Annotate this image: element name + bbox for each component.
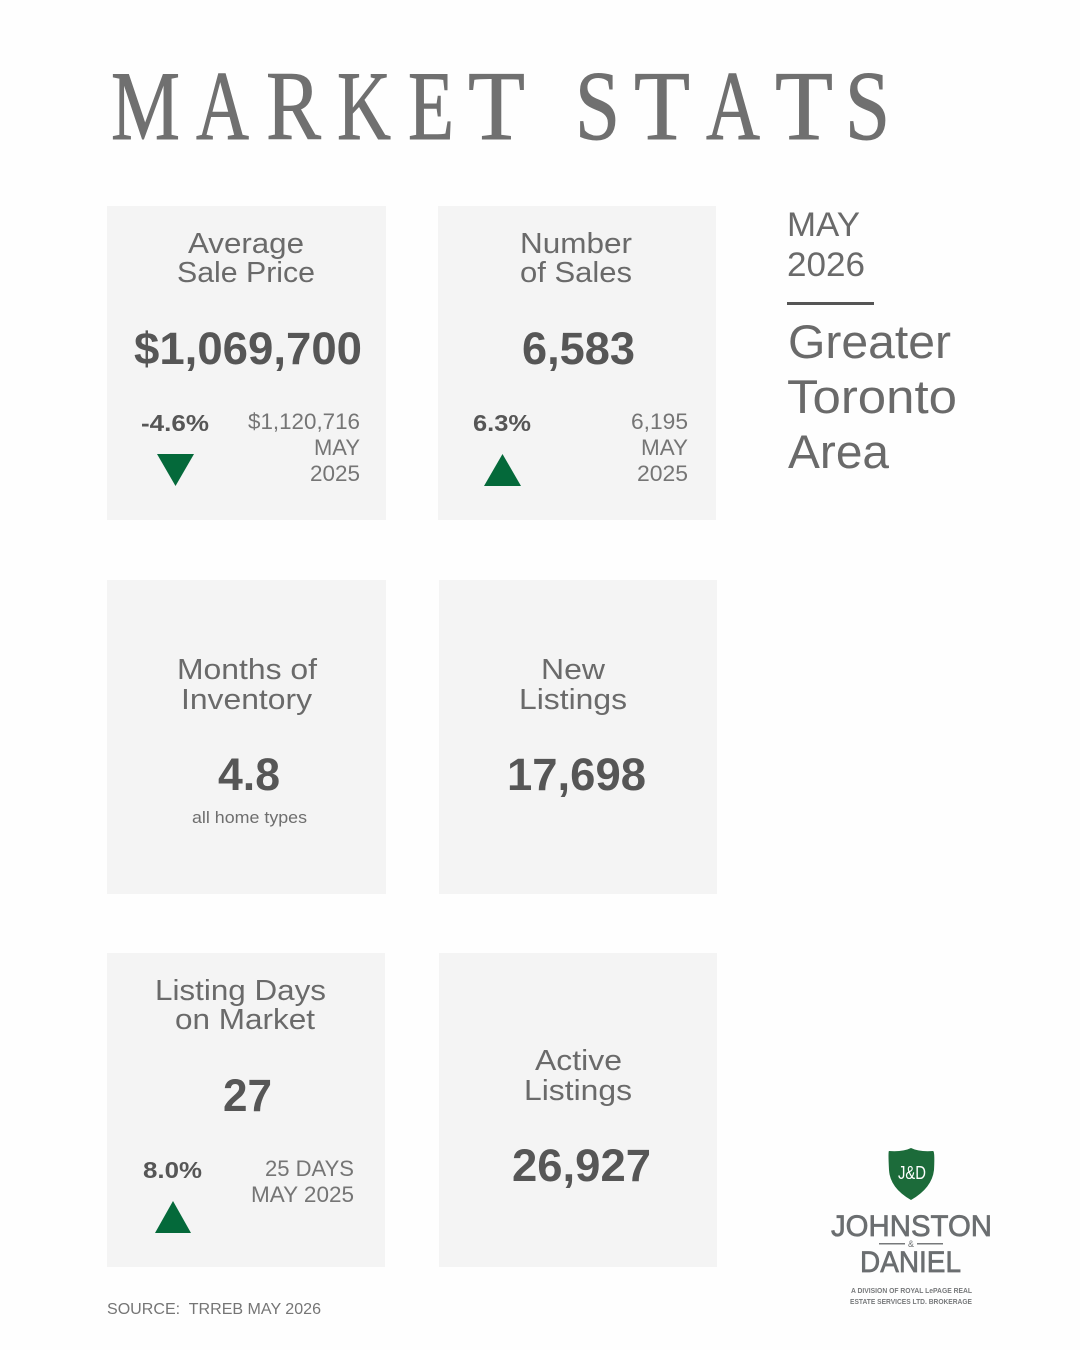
- title: A: [706, 52, 760, 161]
- panel: active listings: [439, 953, 717, 1267]
- date and region: Toronto: [787, 370, 957, 423]
- title: T: [775, 52, 833, 161]
- date and region: Greater: [788, 315, 951, 368]
- title: E: [408, 52, 454, 161]
- title: [111, 52, 890, 161]
- logo: ESTATE SERVICES LTD. BROKERAGE: [850, 1297, 972, 1306]
- title: T: [634, 52, 690, 161]
- logo: A DIVISION OF ROYAL LePAGE REAL: [851, 1286, 972, 1295]
- panel: months of inventory: all home types: [192, 808, 307, 827]
- panel: average sale price: [107, 206, 386, 520]
- logo: DANIEL: [860, 1246, 961, 1279]
- logo: &: [908, 1239, 914, 1249]
- title: S: [845, 52, 890, 161]
- panel: listing days on market: [107, 953, 385, 1267]
- panel: number of sales: 2025: [637, 461, 688, 486]
- panel: listing days on market: 25 DAYS: [265, 1156, 354, 1181]
- title: M: [111, 52, 180, 161]
- panel: new listings: [439, 580, 717, 894]
- panel: listing days on market: 27: [223, 1070, 272, 1121]
- icon: up arrow: [484, 454, 521, 486]
- panel: new listings: New: [541, 654, 606, 686]
- panel: listing days on market: Listing Days: [155, 975, 326, 1007]
- panel: average sale price: $1,069,700: [134, 323, 362, 374]
- logo: JOHNSTON: [831, 1210, 992, 1243]
- panel: new listings: 17,698: [507, 749, 646, 800]
- panel: number of sales: [438, 206, 716, 520]
- date and region: MAY: [787, 206, 860, 244]
- panel: number of sales: Number: [520, 228, 632, 260]
- source note: SOURCE: TRREB MAY 2026: [107, 1301, 321, 1318]
- panel: number of sales: MAY: [641, 435, 688, 460]
- panel: months of inventory: [107, 580, 386, 894]
- panel: listing days on market: on Market: [175, 1004, 315, 1036]
- date and region: 2026: [787, 246, 865, 284]
- panel: average sale price: MAY: [314, 435, 360, 460]
- panel: active listings: 26,927: [512, 1140, 651, 1191]
- panel: average sale price: Average: [188, 228, 304, 260]
- panel: number of sales: of Sales: [520, 257, 632, 289]
- panel: number of sales: 6,195: [631, 409, 688, 434]
- panel: average sale price: -4.6%: [141, 410, 209, 436]
- icon: shield: [888, 1148, 934, 1200]
- panel: number of sales: 6.3%: [473, 410, 531, 436]
- panel: average sale price: $1,120,716: [248, 409, 360, 434]
- title: T: [468, 52, 525, 161]
- panel: months of inventory: 4.8: [218, 749, 280, 800]
- panel: listing days on market: 8.0%: [143, 1157, 202, 1183]
- title: R: [266, 52, 321, 161]
- icon: down arrow: [157, 454, 194, 486]
- date and region: [787, 206, 957, 478]
- panel: average sale price: 2025: [310, 461, 360, 486]
- logo: J&D: [898, 1163, 926, 1183]
- logo: [831, 1148, 992, 1306]
- date and region: Area: [788, 425, 890, 478]
- panel: new listings: Listings: [519, 684, 627, 716]
- panel: active listings: Active: [535, 1045, 622, 1077]
- title: S: [575, 52, 620, 161]
- icon: up arrow: [155, 1201, 191, 1233]
- panel: months of inventory: Inventory: [181, 684, 313, 716]
- title: K: [337, 52, 391, 161]
- panel: listing days on market: MAY 2025: [251, 1182, 354, 1207]
- panel: active listings: Listings: [524, 1075, 632, 1107]
- title: A: [196, 52, 249, 161]
- panel: number of sales: 6,583: [522, 323, 635, 374]
- panel: average sale price: Sale Price: [177, 257, 315, 289]
- panel: months of inventory: Months of: [177, 654, 318, 686]
